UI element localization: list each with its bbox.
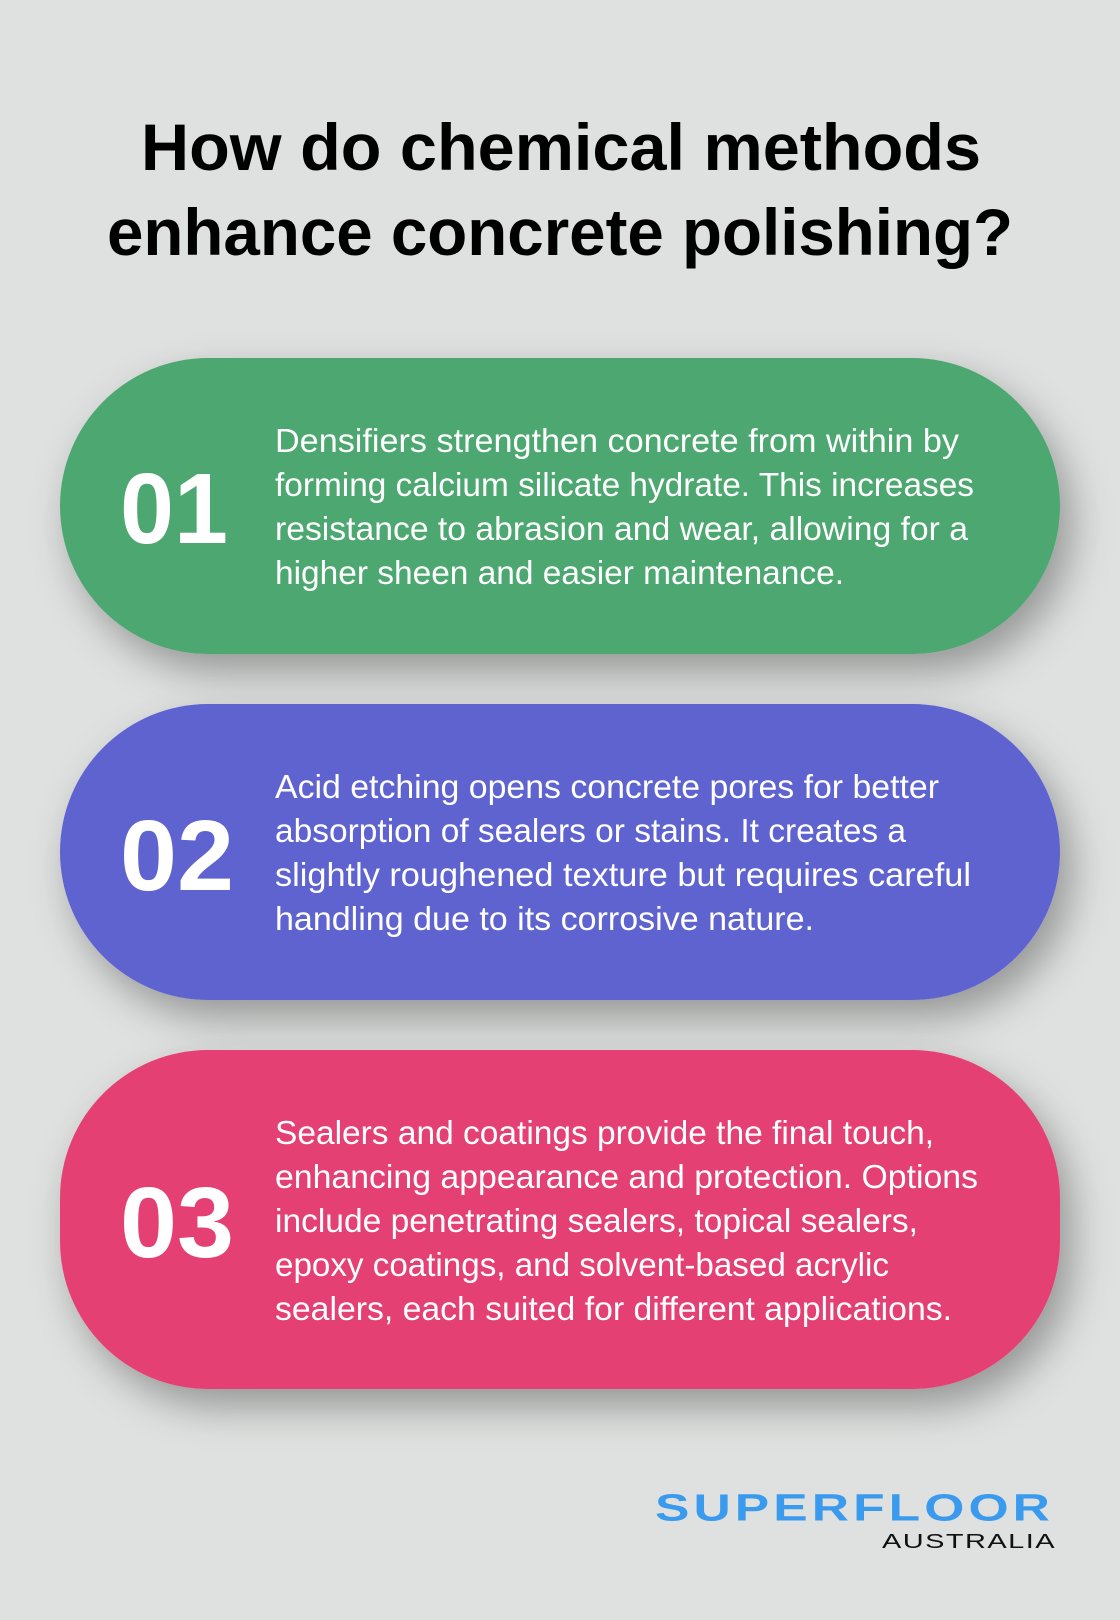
step 03 description: enhancing appearance and protection. Options [275,1158,978,1195]
step 01 description: higher sheen and easier maintenance. [275,554,844,591]
step 03 description [275,1114,978,1327]
logo: Superfloor Australia: AUSTRALIA [882,1531,1056,1553]
step 01 description: Densifiers strengthen concrete from within by [275,422,960,459]
title: How do chemical methods [141,110,981,184]
title [107,110,1013,269]
step 02 description: Acid etching opens concrete pores for better [275,768,939,805]
panel: step 01 densifiers [60,358,1060,654]
step number 02: 02 [120,800,234,912]
step 02 description: slightly roughened texture but requires careful [275,856,971,893]
logo: Superfloor Australia [655,1488,1056,1553]
title: enhance concrete polishing? [107,195,1013,269]
step 03 description: include penetrating sealers, topical sealers, [275,1202,918,1239]
green pill background [60,358,1060,654]
step 03 description: sealers, each suited for different applications. [275,1290,952,1327]
step 01 description: resistance to abrasion and wear, allowing for a [275,510,969,547]
panel: step 03 sealers and coatings [60,1050,1060,1389]
pink pill background [60,1050,1060,1389]
logo: Superfloor Australia: SUPERFLOOR [655,1488,1054,1530]
blue pill background [60,704,1060,1000]
step 01 description [275,422,974,591]
step 02 description: handling due to its corrosive nature. [275,900,814,937]
step 01 description: forming calcium silicate hydrate. This increases [275,466,974,503]
step 03 description: epoxy coatings, and solvent-based acrylic [275,1246,889,1283]
step 02 description: absorption of sealers or stains. It creates a [275,812,907,849]
panel: step 02 acid etching [60,704,1060,1000]
step 03 description: Sealers and coatings provide the final touch, [275,1114,934,1151]
step number 03: 03 [120,1167,234,1279]
step number 01: 01 [120,453,228,565]
step 02 description [275,768,971,937]
